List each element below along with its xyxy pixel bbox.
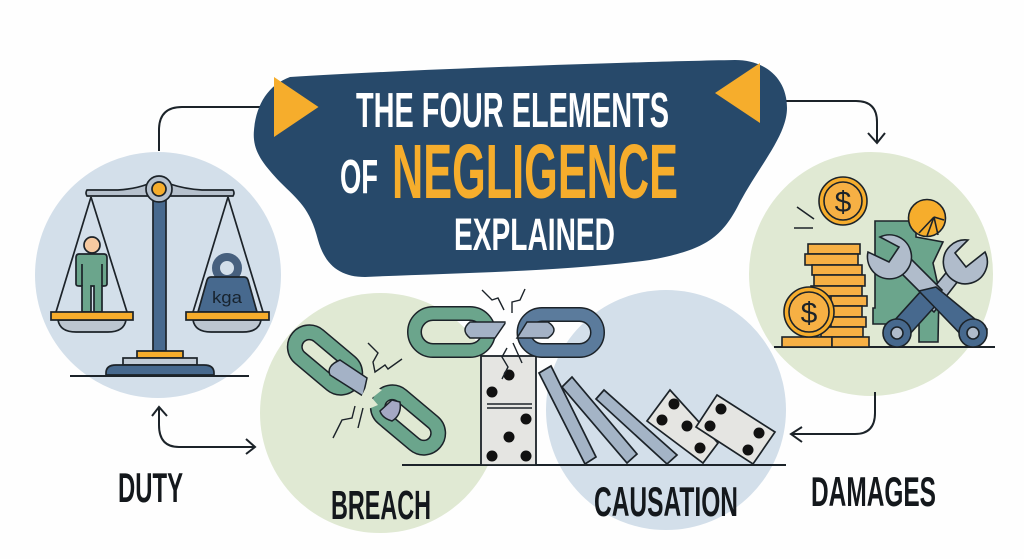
falling bar 3 (596, 390, 677, 464)
label: causation: CAUSATION (594, 478, 738, 525)
grey broken bar (329, 360, 367, 396)
fallen domino 1 (647, 390, 718, 463)
upper left link (289, 326, 361, 394)
scale strings (56, 197, 263, 312)
ground line (774, 346, 995, 348)
icon: person (76, 237, 107, 312)
panel: duty circle background (35, 152, 281, 398)
lower right link (372, 386, 444, 454)
top coin: $ (835, 186, 852, 219)
label: duty: DUTY (118, 464, 183, 511)
icon: weight (198, 257, 257, 312)
icon: broken chain diagonal (289, 326, 444, 454)
break gap (352, 383, 382, 432)
arrow: title to duty (159, 107, 274, 151)
icon: horizontal broken chain (414, 289, 598, 379)
icon: standing domino (481, 356, 536, 465)
title word NEGLIGENCE: NEGLIGENCE (392, 129, 678, 215)
title word OF: OF (340, 151, 378, 204)
cracks (333, 343, 402, 438)
left green link (414, 314, 488, 350)
pie chart (908, 200, 946, 236)
banner right triangle (715, 63, 760, 123)
icon: money and wrenches (774, 177, 995, 347)
panel: damages circle background (749, 152, 993, 396)
arrow: title to damages (769, 101, 885, 143)
banner left triangle (274, 77, 318, 137)
left grey bar (465, 322, 506, 338)
lower coin: $ (801, 297, 818, 330)
lower coin (784, 287, 834, 337)
coin stack (782, 244, 869, 347)
icon: falling dominoes (539, 366, 775, 464)
falling bar 2 (562, 377, 637, 463)
scale column (153, 200, 166, 351)
purple stub (380, 400, 400, 421)
panel: causation circle background (546, 290, 786, 530)
falling bar 1 (539, 366, 596, 464)
scale beam (86, 184, 234, 196)
wrench left (867, 235, 987, 347)
green banknote (873, 221, 943, 342)
top chain cracks (482, 289, 525, 379)
icon: balance scale (51, 176, 269, 376)
top coin (819, 177, 867, 225)
title line 1: THE FOUR ELEMENTS (356, 84, 669, 138)
break gap (500, 300, 518, 345)
label: breach: BREACH (331, 482, 431, 528)
arrow: damages to causation (791, 392, 875, 442)
title line 3: EXPLAINED (454, 209, 615, 260)
arrow: duty to breach bidirectional (152, 407, 255, 454)
spark lines (794, 207, 814, 228)
title banner (254, 60, 787, 277)
right grey bar (517, 322, 554, 338)
panel: breach circle background (260, 293, 500, 533)
banner blob (254, 60, 787, 277)
icon: weight: kga (212, 288, 243, 307)
scale pivot (146, 176, 172, 202)
wrench right (883, 240, 987, 347)
scale ground line (70, 375, 249, 377)
scale base (106, 351, 214, 375)
fallen domino 2 (696, 395, 775, 464)
right blue link (524, 314, 598, 350)
ground line: dominoes (402, 464, 786, 466)
left pan (51, 312, 133, 332)
right pan (186, 312, 269, 332)
label: damages: DAMAGES (811, 468, 936, 515)
